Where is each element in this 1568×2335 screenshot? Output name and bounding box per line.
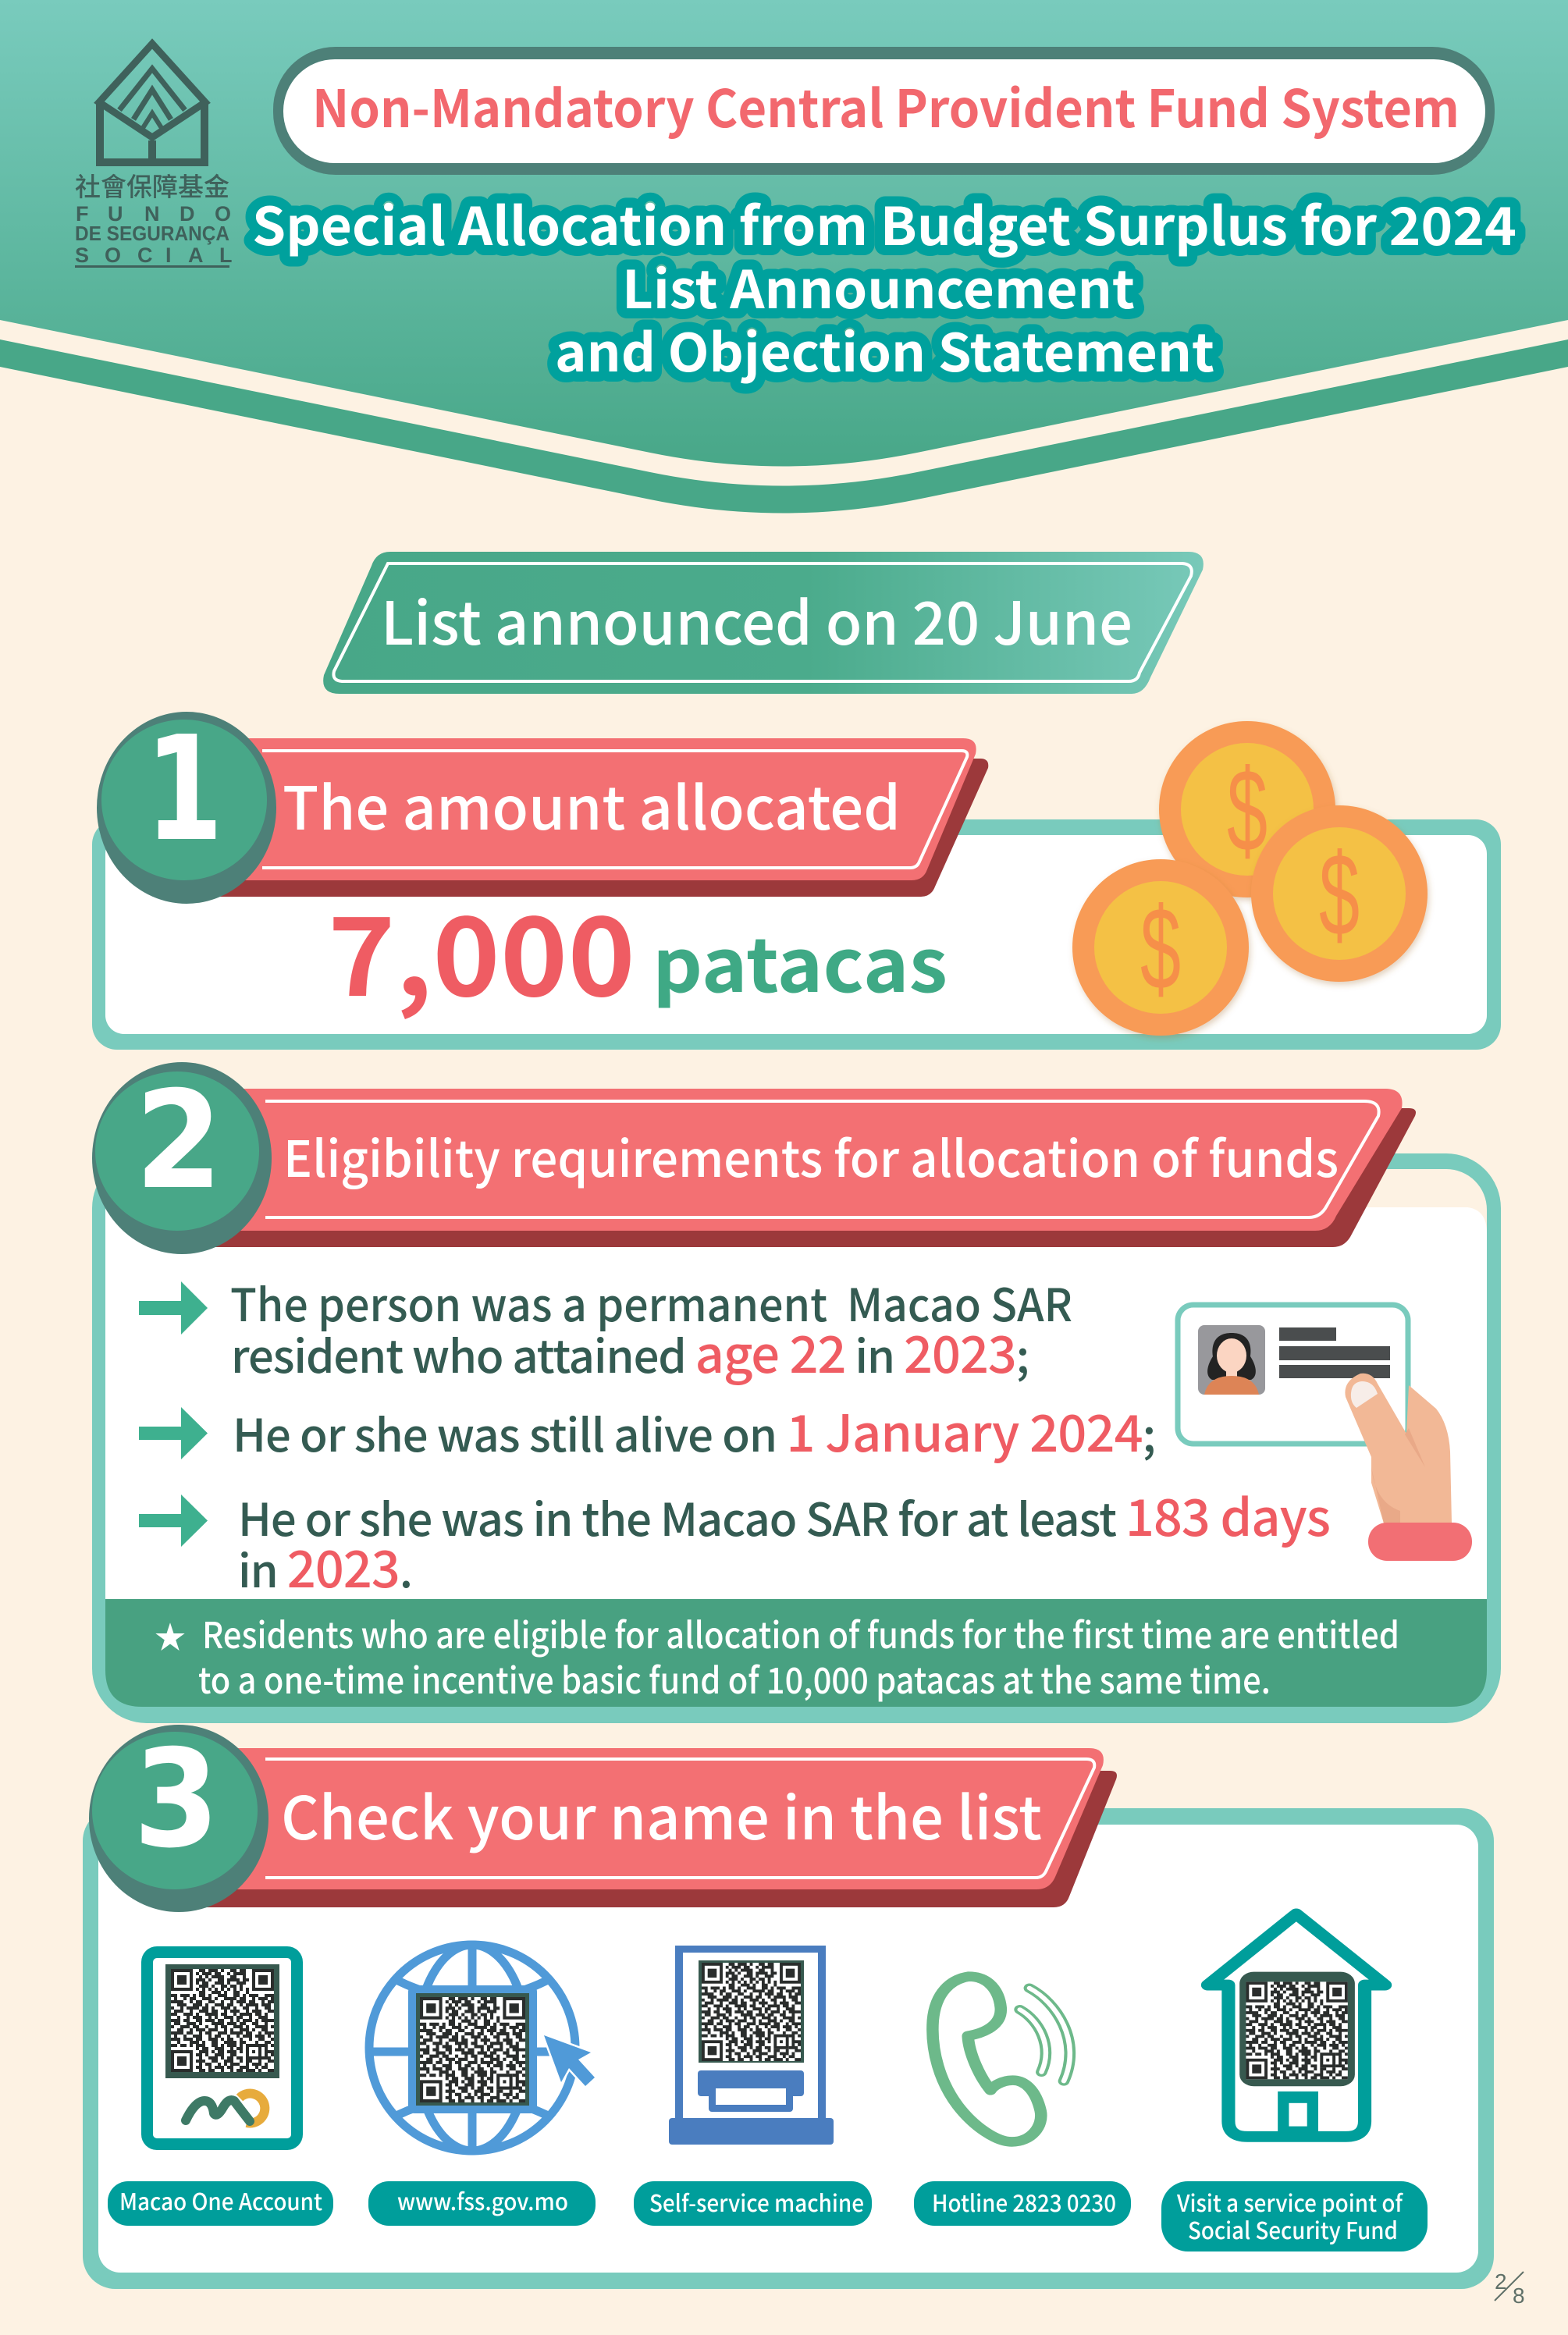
panel 1 frame [92,819,1501,1050]
number badge 1: 1 [145,705,223,873]
panel 3 frame [83,1808,1494,2289]
number badge 2: 2 [135,1061,222,1219]
logo: Fundo de Segurança Social: SOCIAL [75,243,233,267]
label: service point: Social Security Fund [1188,2212,1398,2246]
number badge 2 [92,1061,272,1254]
label: Macao One Account: Macao One Account [119,2183,322,2217]
label: service point [1161,2181,1428,2251]
page number [1495,2269,1525,2308]
icon: coins [1072,721,1428,1036]
number badge 3: 3 [133,1720,219,1878]
amount: 7,000 patacas [328,870,948,1028]
main heading: List Announcement [622,248,1135,324]
note: first-time incentive: Residents who are eligible for allocation of funds for the first time are entitled [202,1608,1399,1659]
title pill: Non-Mandatory Central Provident Fund System [312,68,1460,143]
main heading: Special Allocation from Budget Surplus for 2024 [252,185,1516,261]
number badge 3 [89,1720,268,1912]
note: first-time incentive: ★ [155,1612,186,1658]
ribbon 1: The amount allocated [283,761,901,847]
label: self-service machine: Self-service machine [649,2184,864,2219]
label: website: www.fss.gov.mo [397,2183,568,2217]
icon: Macao One Account phone [141,1946,303,2150]
icon: coins: $ [1227,745,1268,876]
icon: ID card held in hand [1178,1305,1472,1561]
header band [0,0,1568,514]
arrow 2 [139,1407,208,1459]
ribbon 3 [187,1748,1117,1907]
arrow 3 [139,1494,208,1547]
icon: coins: $ [1140,883,1181,1014]
note: first-time incentive: to a one-time incentive basic fund of 10,000 patacas at the same time. [198,1653,1271,1704]
panel 2 frame [92,1153,1501,1723]
requirement 1: The person was a permanent Macao SAR [230,1269,1072,1335]
label: website [368,2181,596,2226]
label: service point: Visit a service point of [1176,2184,1403,2219]
main heading: and Objection Statement [555,311,1214,387]
ribbon 3: Check your name in the list [281,1771,1042,1857]
panel 2: eligibility [92,1061,1501,1723]
ribbon 2 [187,1089,1416,1247]
icon: globe website [369,1945,595,2151]
date banner: List announced on 20 June [381,576,1132,662]
logo: Fundo de Segurança Social [75,44,233,268]
requirement 3: in 2023. [238,1529,413,1602]
panel 3: check your name [83,1720,1494,2289]
note: first-time incentive [105,1599,1487,1707]
requirement 3 [238,1477,1331,1602]
icon: self-service machine [669,1946,834,2145]
amount: 7,000 patacas: 7,000 [328,870,635,1028]
ribbon 1 [187,738,988,897]
icon: service point house [1207,1914,1385,2137]
logo: Fundo de Segurança Social: DE SEGURANÇA [75,222,229,245]
number badge 1 [97,705,276,904]
requirement 2: He or she was still alive on 1 January 2024; [233,1393,1156,1466]
date banner [323,552,1204,694]
label: hotline: Hotline 2823 0230 [932,2184,1116,2219]
arrow 1 [139,1281,208,1335]
main heading [252,185,1516,387]
page number: 2 [1495,2269,1507,2294]
panel 1: amount allocated [92,705,1501,1050]
amount: 7,000 patacas: patacas [652,907,948,1014]
title pill [273,47,1495,175]
requirement 1 [230,1269,1072,1388]
icon: coins: $ [1319,829,1360,960]
logo: Fundo de Segurança Social: FUNDO [76,202,231,226]
page number: 8 [1513,2283,1525,2308]
ribbon 2: Eligibility requirements for allocation of funds [283,1120,1339,1192]
requirement 3: He or she was in the Macao SAR for at least 183 days [238,1477,1331,1551]
requirement 1: resident who attained age 22 in 2023; [231,1314,1029,1388]
logo: Fundo de Segurança Social: 社會保障基金 [75,166,229,204]
icon: telephone hotline [933,1977,1070,2141]
